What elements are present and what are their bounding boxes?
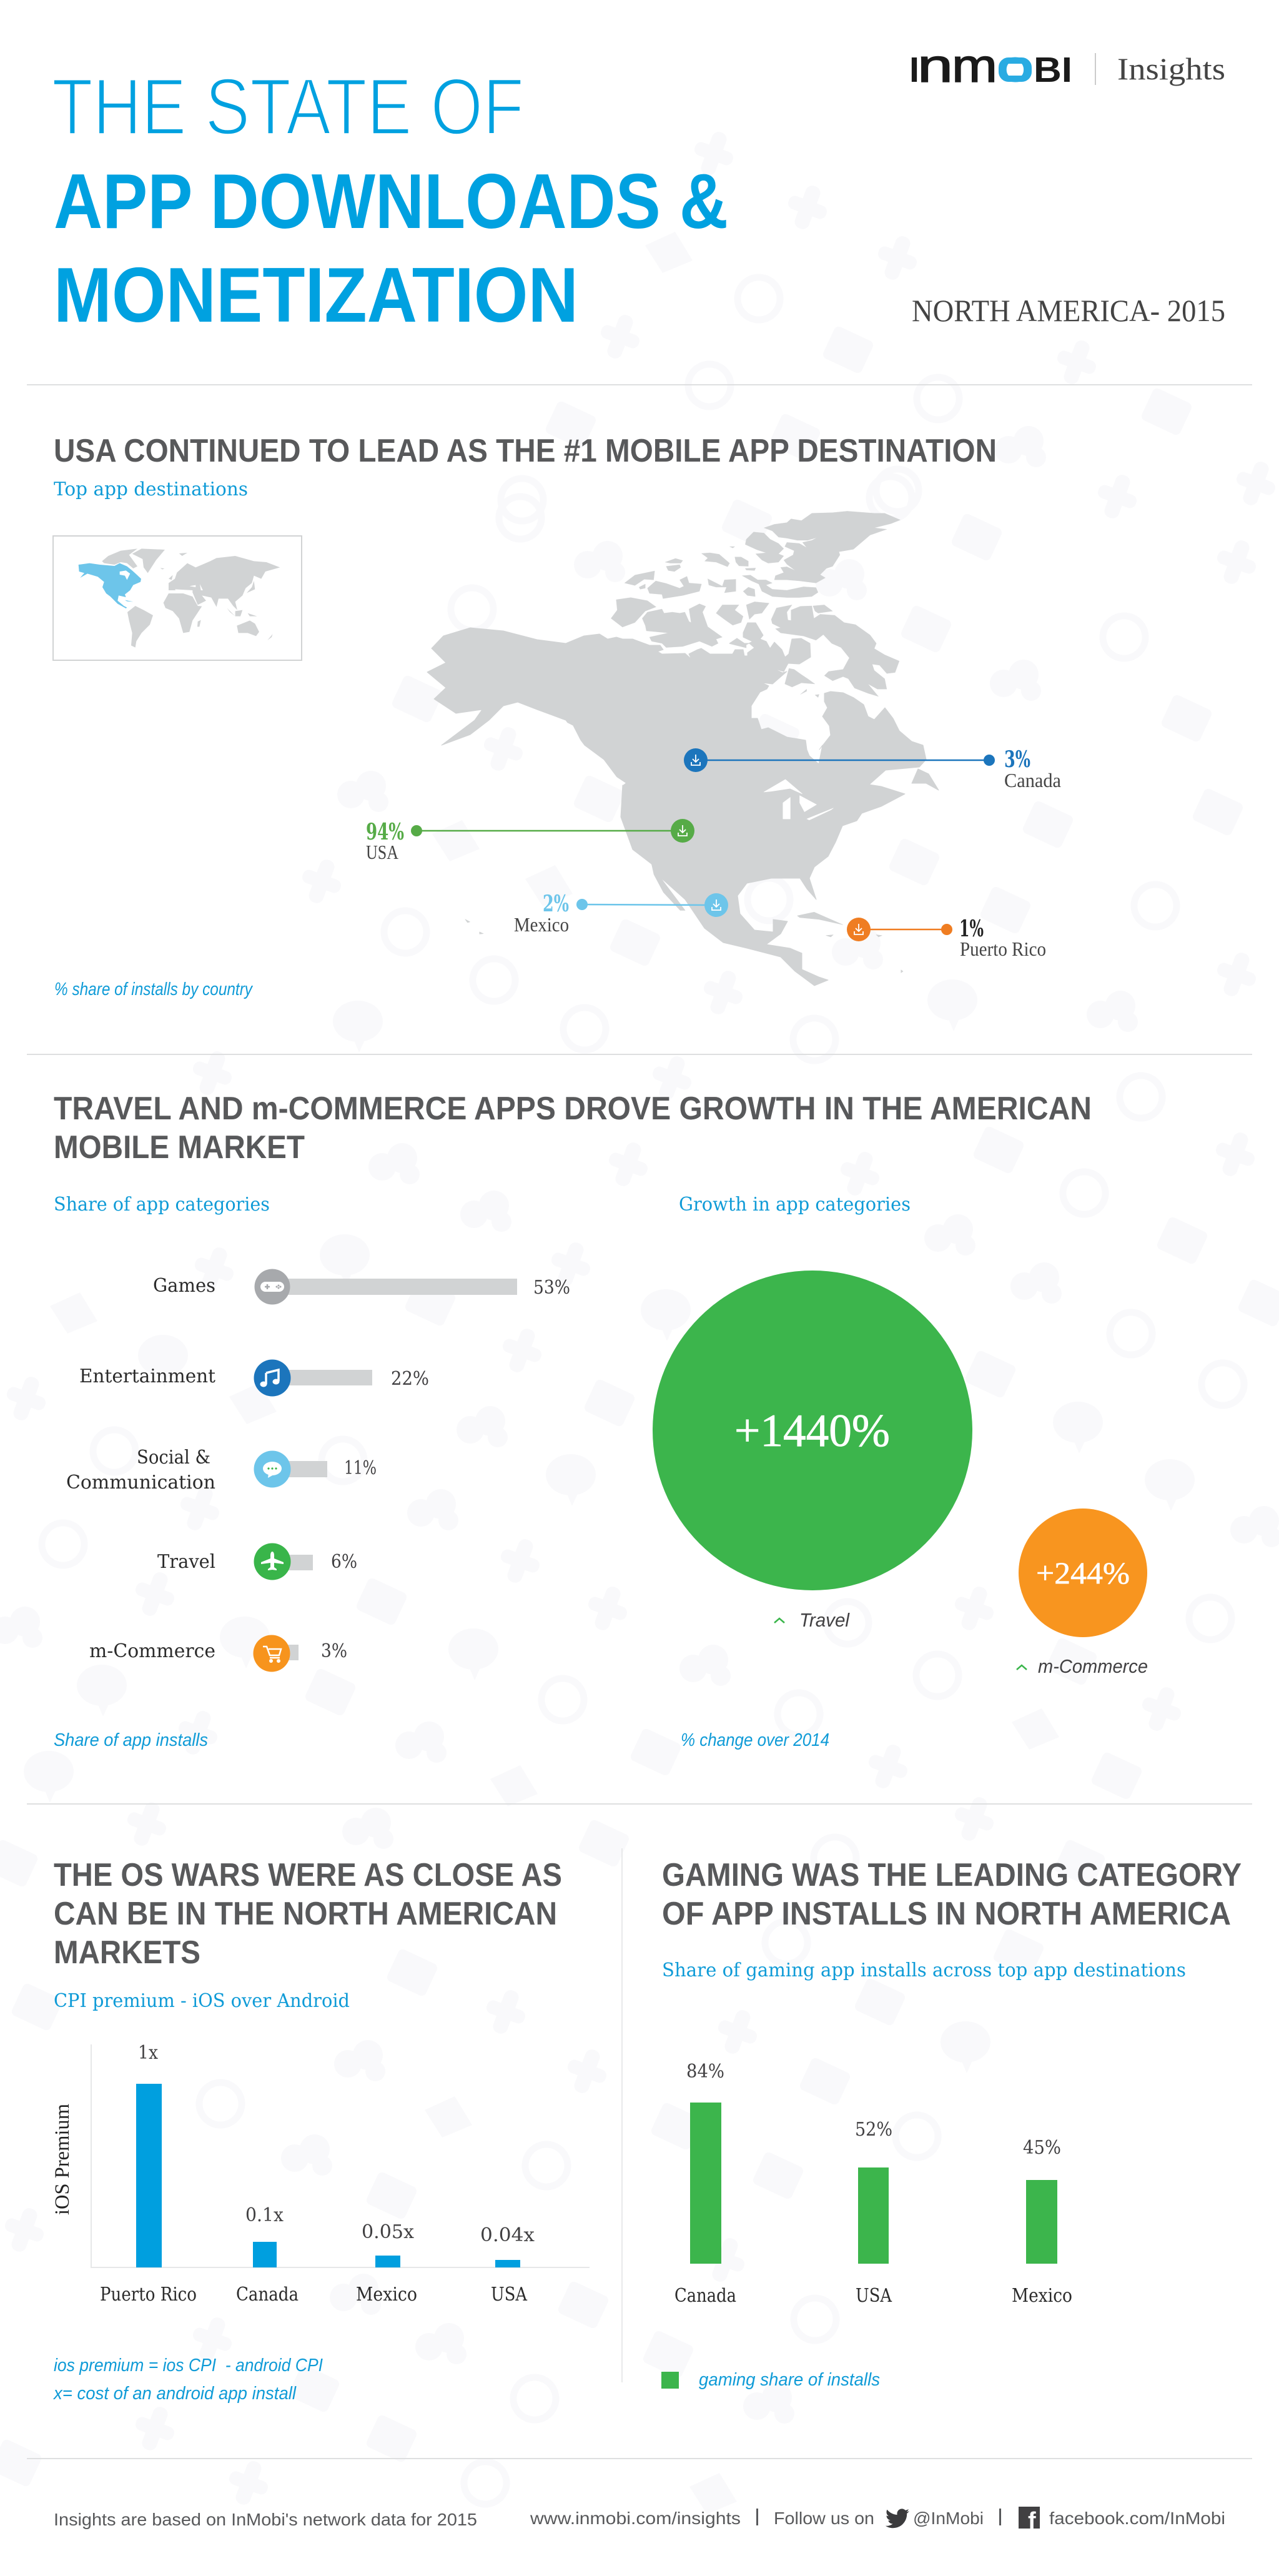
heading: OS wars: THE OS WARS WERE AS CLOSE AS: [54, 1857, 562, 1893]
marker: Puerto Rico 1%: 1%: [959, 916, 984, 942]
title line: APP DOWNLOADS &: APP DOWNLOADS &: [54, 159, 728, 245]
bubble: m-commerce +244%: [1017, 1508, 1148, 1677]
footer: [54, 2507, 1225, 2534]
marker: USA 94%: USA: [366, 841, 398, 863]
marker: Puerto Rico 1%: Puerto Rico: [960, 938, 1046, 960]
region label: North America 2015: NORTH AMERICA- 2015: [912, 293, 1225, 328]
facebook link: facebook.com/InMobi: [1049, 2509, 1225, 2528]
bubble: travel +1440%: [653, 1271, 972, 1631]
bar chart: gaming share of installs: Mexico: [1012, 2285, 1072, 2307]
follow us: Follow us on: [774, 2509, 874, 2528]
bar chart: iOS premium: iOS Premium: [51, 2104, 74, 2215]
bar chart: iOS premium: 0.04x: [480, 2224, 535, 2246]
panel: OS wars: [51, 1857, 590, 2404]
bar: travel 6%: [157, 1543, 357, 1580]
heading: OS wars: MARKETS: [54, 1934, 200, 1971]
panel: top app destinations: [53, 433, 1061, 999]
map: North America: [427, 511, 939, 986]
title line: MONETIZATION: MONETIZATION: [54, 252, 578, 339]
subheading: share of gaming installs: Share of gaming app installs across top app destinations: [662, 1959, 1186, 1981]
bar: games 53%: Games: [153, 1275, 215, 1297]
marker: Canada 3%: [684, 746, 1061, 791]
icon: facebook: [1019, 2507, 1040, 2534]
subheading: growth in app categories: Growth in app categories: [679, 1194, 911, 1216]
bar chart: iOS premium: 0.05x: [362, 2221, 414, 2243]
bar chart: gaming share of installs: [674, 2061, 1072, 2307]
marker: USA 94%: 94%: [366, 819, 404, 845]
bar chart: gaming share of installs: Canada: [674, 2285, 736, 2307]
icon: twitter bird: [886, 2509, 909, 2528]
bar: social and communication 11%: 11%: [344, 1457, 377, 1479]
icon: facebook: f: [1028, 2508, 1036, 2534]
logo: InMobi Insights: [909, 39, 1225, 92]
note: share of app installs: Share of app installs: [54, 1730, 208, 1750]
marker: USA 94%: [366, 819, 694, 863]
bar chart: gaming share of installs: USA: [856, 2285, 892, 2307]
heading: USA lead: USA CONTINUED TO LEAD AS THE #1 MOBILE APP DESTINATION: [54, 433, 997, 469]
marker: Mexico 2%: 2%: [543, 891, 569, 917]
subheading: top app destinations: Top app destinations: [54, 478, 248, 500]
heading: travel and m-commerce: TRAVEL AND m-COMMERCE APPS DROVE GROWTH IN THE AMERICAN: [54, 1091, 1092, 1127]
bar chart: gaming share of installs: 45%: [1023, 2137, 1061, 2159]
bar chart: iOS premium: [51, 2042, 590, 2306]
bar: m-commerce 3%: [89, 1635, 347, 1672]
logo: InMobi Insights: O: [999, 50, 1032, 90]
bar: games 53%: 53%: [533, 1277, 570, 1299]
marker: Canada 3%: 3%: [1004, 746, 1030, 773]
bar: m-commerce 3%: 3%: [321, 1640, 347, 1662]
bubble: travel +1440%: +1440%: [734, 1405, 890, 1457]
bar chart: iOS premium: USA: [491, 2284, 527, 2306]
title line: THE STATE OF: THE STATE OF: [52, 62, 524, 152]
bar: social and communication 11%: Social &: [137, 1447, 210, 1469]
marker: Puerto Rico 1%: [847, 916, 1046, 960]
panel: gaming share: [661, 1857, 1242, 2390]
bar chart: iOS premium: Puerto Rico: [100, 2284, 197, 2306]
bar: entertainment 22%: Entertainment: [79, 1365, 215, 1387]
bar: social and communication 11%: Communication: [66, 1472, 215, 1494]
bar: travel 6%: Travel: [157, 1551, 215, 1573]
heading: OS wars: [54, 1857, 562, 1971]
bar: social and communication 11%: [66, 1447, 377, 1494]
logo: InMobi Insights: I: [909, 50, 919, 90]
marker: Mexico 2%: [514, 891, 728, 936]
bubble: m-commerce +244%: +244%: [1036, 1555, 1130, 1590]
bar chart: gaming share of installs: 52%: [855, 2119, 892, 2141]
heading: travel and m-commerce: [54, 1091, 1092, 1166]
bar chart: iOS premium: Canada: [236, 2284, 299, 2306]
twitter handle: @InMobi: [913, 2509, 984, 2528]
footer link: insights: www.inmobi.com/insights: [530, 2509, 741, 2528]
heading: gaming: OF APP INSTALLS IN NORTH AMERICA: [662, 1896, 1231, 1932]
header: title block: [52, 62, 728, 339]
heading: travel and m-commerce: MOBILE MARKET: [54, 1129, 305, 1166]
marker: Mexico 2%: Mexico: [514, 913, 569, 936]
heading: gaming: GAMING WAS THE LEADING CATEGORY: [662, 1857, 1242, 1893]
legend: gaming share of installs: gaming share of installs: [699, 2370, 880, 2390]
heading: OS wars: CAN BE IN THE NORTH AMERICAN: [54, 1896, 557, 1932]
source note: Insights are based on InMobi's network data for 2015: [54, 2510, 477, 2529]
note: share of installs by country: % share of installs by country: [54, 979, 253, 999]
logo: InMobi Insights: Insights: [1117, 51, 1225, 86]
marker: Canada 3%: Canada: [1004, 769, 1061, 791]
bar: entertainment 22%: 22%: [391, 1368, 429, 1390]
bar chart: iOS premium: 0.1x: [245, 2204, 284, 2226]
bubble: travel +1440%: Travel: [799, 1609, 850, 1631]
logo: InMobi Insights: BI: [1034, 50, 1072, 90]
notes: iOS premium definition: [52, 2356, 323, 2404]
logo: InMobi Insights: m: [952, 39, 997, 92]
note: change over 2014: % change over 2014: [681, 1730, 829, 1750]
inset: world map: [53, 536, 302, 660]
bar chart: iOS premium: Mexico: [356, 2284, 417, 2306]
bar: entertainment 22%: [79, 1359, 429, 1397]
bar chart: share of app categories: [66, 1269, 570, 1672]
heading: gaming: [662, 1857, 1242, 1932]
subheading: share of app categories: Share of app categories: [54, 1194, 270, 1216]
logo: InMobi Insights: n: [917, 39, 953, 92]
bar: m-commerce 3%: m-Commerce: [89, 1640, 215, 1662]
bar chart: gaming share of installs: 84%: [686, 2061, 724, 2083]
bar: travel 6%: 6%: [331, 1551, 357, 1573]
panel: travel and m-commerce growth: [54, 1091, 1148, 1750]
notes: iOS premium definition: ios premium = ios CPI - android CPI: [54, 2356, 323, 2375]
bar chart: iOS premium: 1x: [138, 2042, 158, 2064]
subheading: CPI premium: CPI premium - iOS over Android: [54, 1990, 350, 2012]
bubble: m-commerce +244%: m-Commerce: [1038, 1655, 1148, 1677]
bar: games 53%: [153, 1269, 570, 1304]
notes: iOS premium definition: x= cost of an android app install: [52, 2384, 297, 2404]
